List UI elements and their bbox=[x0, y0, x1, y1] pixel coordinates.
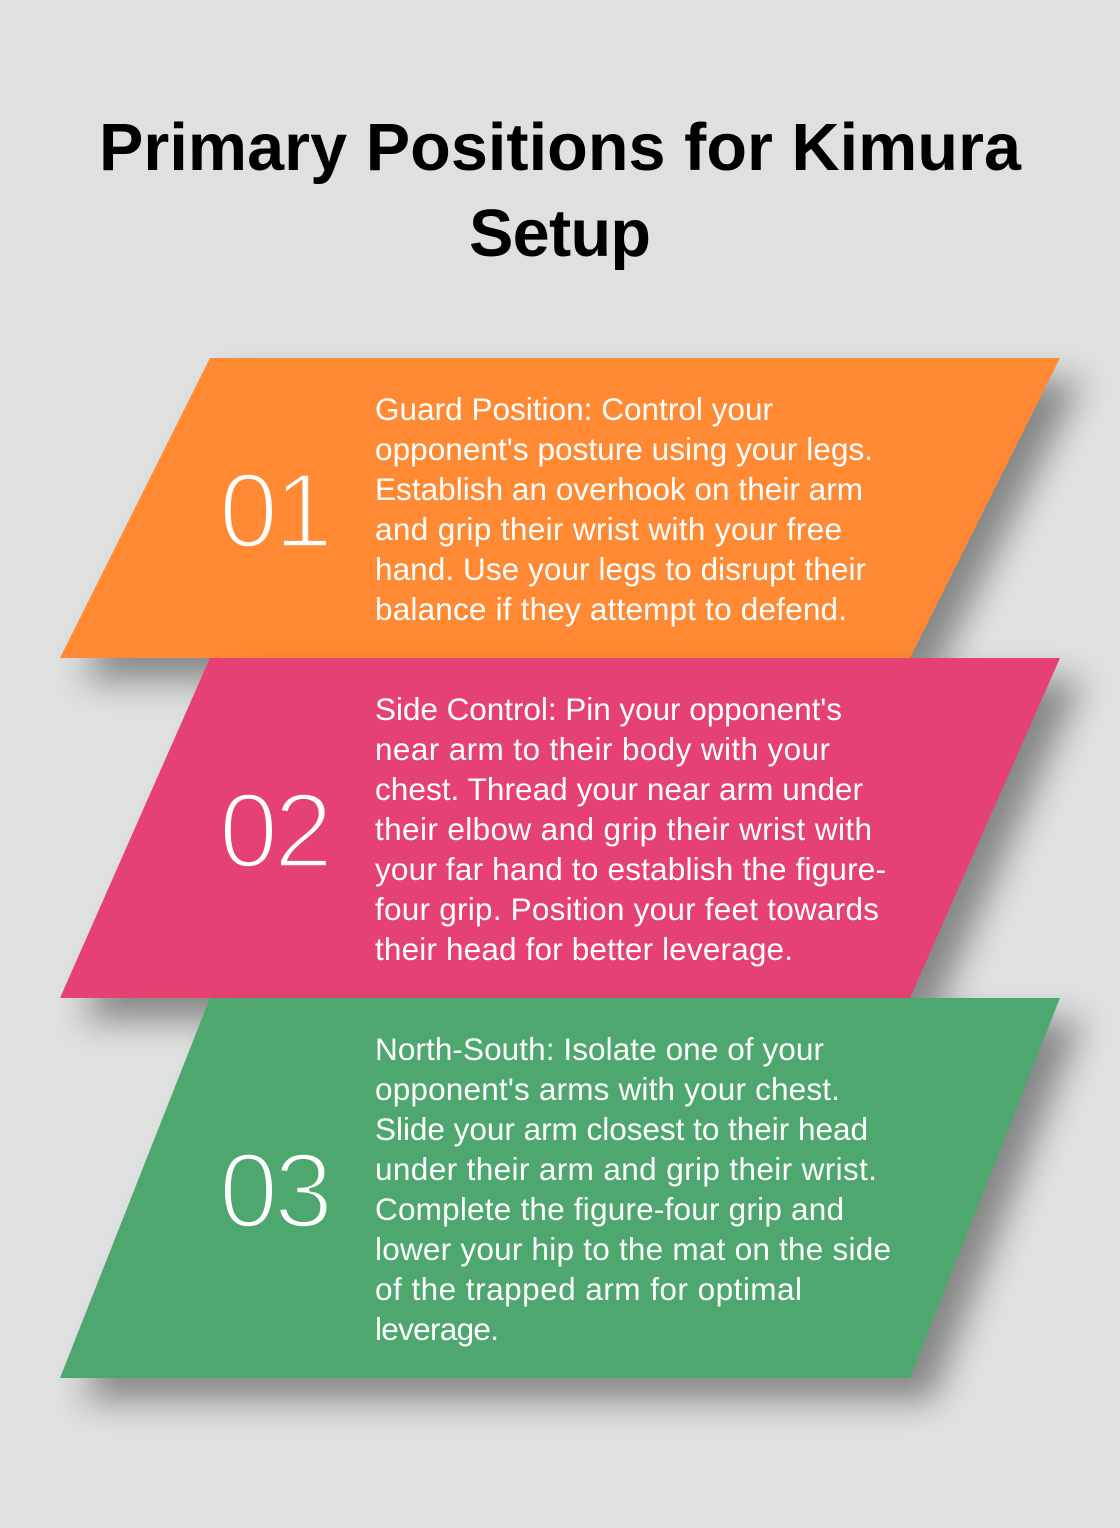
text block: side control: their head for better leverage. bbox=[375, 931, 793, 967]
text block: north-south: under their arm and grip their wrist. bbox=[375, 1151, 877, 1187]
text block: side control: chest. Thread your near arm under bbox=[375, 771, 863, 807]
text block: side control bbox=[375, 691, 886, 967]
text block: side control: four grip. Position your feet towards bbox=[375, 891, 879, 927]
text block: guard position bbox=[375, 391, 873, 627]
text block: north-south: Complete the figure-four grip and bbox=[375, 1191, 844, 1227]
text block: north-south: North-South: Isolate one of your bbox=[375, 1031, 824, 1067]
text block: guard position: Establish an overhook on their arm bbox=[375, 471, 863, 507]
panel: step 03 north-south bbox=[60, 998, 1060, 1378]
panel: step 01 guard position bbox=[60, 358, 1060, 658]
number 01: 01 bbox=[219, 452, 333, 570]
title bbox=[99, 111, 1022, 271]
title: Primary Positions for Kimura bbox=[99, 111, 1022, 185]
text block: north-south bbox=[375, 1031, 891, 1347]
text block: north-south: of the trapped arm for optimal bbox=[375, 1271, 802, 1307]
text block: side control: their elbow and grip their wrist with bbox=[375, 811, 872, 847]
text block: guard position: Guard Position: Control your bbox=[375, 391, 773, 427]
text block: north-south: lower your hip to the mat on the side bbox=[375, 1231, 891, 1267]
text block: north-south: leverage. bbox=[375, 1311, 499, 1347]
text block: north-south: opponent's arms with your chest. bbox=[375, 1071, 840, 1107]
title: Setup bbox=[469, 197, 651, 271]
number 02: 02 bbox=[219, 772, 333, 890]
text block: guard position: hand. Use your legs to disrupt their bbox=[375, 551, 866, 587]
number 03: 03 bbox=[219, 1132, 333, 1250]
orange parallelogram bbox=[60, 358, 1060, 658]
text block: side control: Side Control: Pin your opponent's bbox=[375, 691, 842, 727]
text block: side control: your far hand to establish the figure- bbox=[375, 851, 886, 887]
text block: north-south: Slide your arm closest to their head bbox=[375, 1111, 868, 1147]
panel: step 02 side control bbox=[60, 658, 1060, 998]
text block: guard position: opponent's posture using your legs. bbox=[375, 431, 873, 467]
text block: guard position: balance if they attempt to defend. bbox=[375, 591, 847, 627]
pink parallelogram bbox=[60, 658, 1060, 998]
text block: guard position: and grip their wrist with your free bbox=[375, 511, 842, 547]
text block: side control: near arm to their body with your bbox=[375, 731, 830, 767]
green parallelogram bbox=[60, 998, 1060, 1378]
